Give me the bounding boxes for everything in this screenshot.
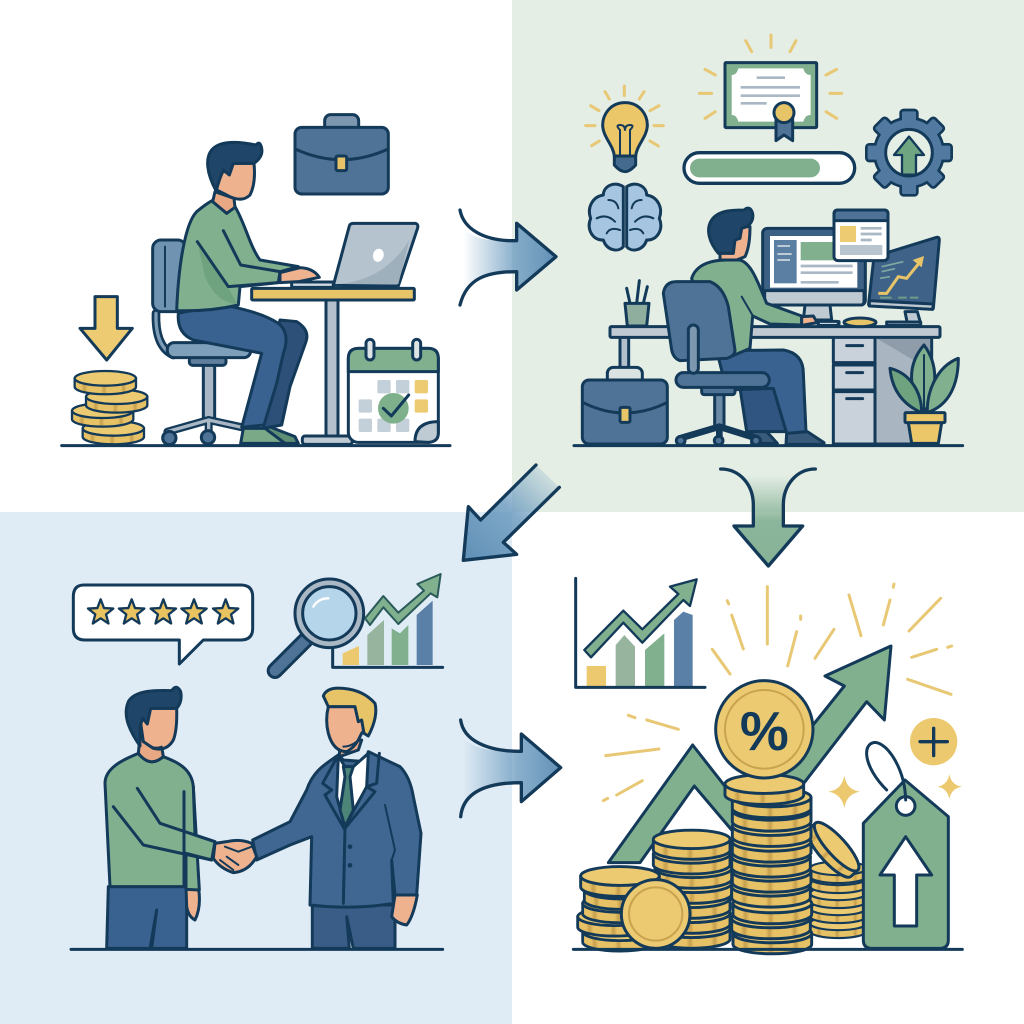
icon: main monitor <box>763 228 865 325</box>
arrow: step 2 to step 4 <box>721 469 815 566</box>
ground line <box>62 441 450 450</box>
leaning coin <box>802 817 865 883</box>
progress bar <box>684 153 855 183</box>
bar chart with trend arrow <box>576 578 705 687</box>
ground line <box>71 945 443 954</box>
ground line <box>574 441 963 450</box>
coin stack: back right <box>810 862 867 938</box>
icon: gear with up arrow <box>868 111 950 194</box>
plus badge <box>910 718 957 765</box>
icon: laptop <box>292 223 418 287</box>
icon: brain <box>589 184 661 250</box>
icon: magnifying glass <box>275 579 364 671</box>
icon: mouse and keyboard <box>818 318 876 327</box>
icon: desk <box>252 288 414 444</box>
person: manager in suit <box>253 688 421 948</box>
icon: certificate rays <box>699 35 842 118</box>
coin with percent sign: % <box>740 700 789 762</box>
panel: pay rise outcome <box>573 578 962 954</box>
icon: calendar <box>348 339 438 442</box>
person: worker from behind <box>692 208 824 444</box>
icon: light bulb <box>586 86 663 172</box>
speech bubble with five stars <box>73 585 253 664</box>
icon: coin stack <box>72 371 147 444</box>
icon: desk chair <box>663 282 769 445</box>
coin with percent sign <box>716 681 813 778</box>
coin stack: front left <box>578 867 659 951</box>
coin stack: centre tower <box>725 775 812 954</box>
icon: side monitor with rising chart <box>869 237 939 325</box>
ground line <box>573 945 962 954</box>
icon: desk and drawers <box>610 327 940 444</box>
panel background: top right <box>512 0 1024 512</box>
icon: office chair <box>153 240 251 445</box>
panel: review and negotiation <box>71 574 443 949</box>
panel background: bottom left <box>0 512 512 1024</box>
arrow: step 3 to step 4 <box>461 720 561 817</box>
panel: starting out at a laptop <box>62 115 450 446</box>
sparkles <box>828 774 962 808</box>
panel: upskilling at a workstation <box>574 35 963 446</box>
sunburst rays <box>603 584 952 801</box>
coin stack: back middle <box>653 830 732 948</box>
big growth arrow <box>608 646 891 863</box>
icon: briefcase <box>295 115 388 194</box>
person: employee <box>105 687 215 948</box>
icon: popup window <box>834 210 888 261</box>
person: seated worker <box>177 142 319 443</box>
icon: potted plant <box>890 345 958 443</box>
large front coin <box>621 880 690 948</box>
icon: certificate <box>725 63 817 141</box>
icon: briefcase on floor <box>582 367 667 444</box>
arrow: step 2 to step 3 <box>463 465 559 560</box>
bar chart with trend arrow <box>333 574 443 667</box>
icon: pen cup <box>625 281 649 326</box>
price tag with up arrow <box>863 742 948 948</box>
icon: down arrow <box>80 297 132 360</box>
icon: handshake <box>213 840 257 873</box>
arrow: step 1 to step 2 <box>460 210 556 305</box>
